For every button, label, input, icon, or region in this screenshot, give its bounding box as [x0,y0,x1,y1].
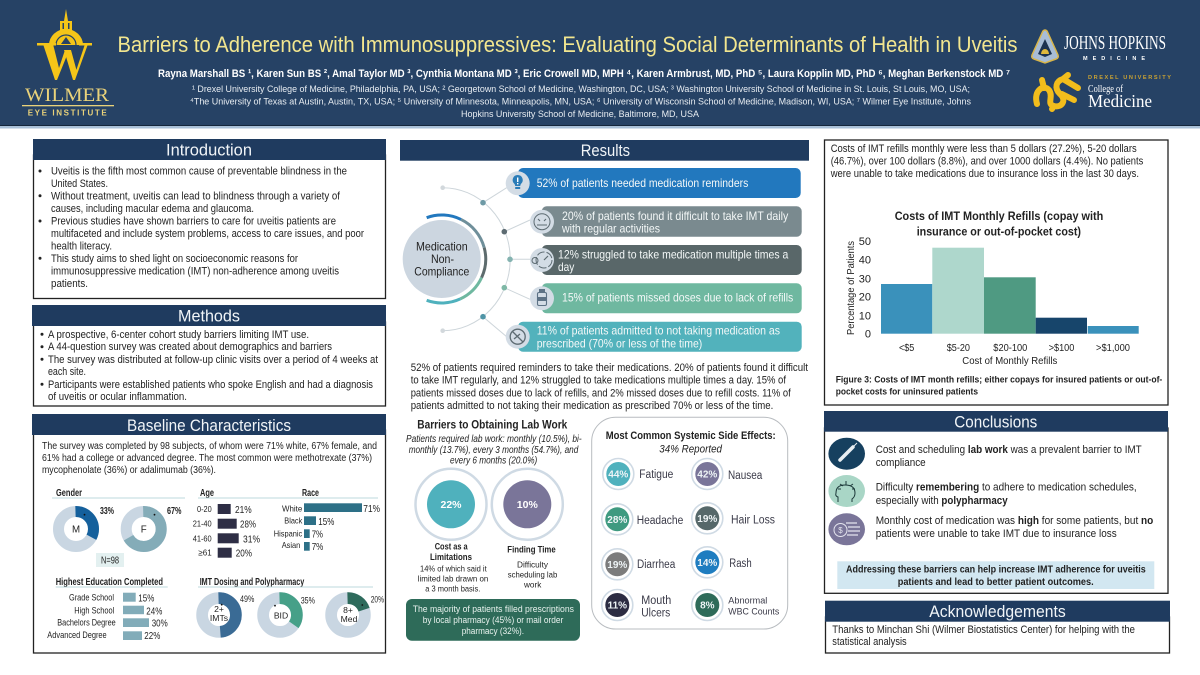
stat: cost limitation 22% [416,469,488,594]
chart: costs of IMT monthly refills: 50 [859,236,871,248]
heading: baseline characteristics [32,414,386,435]
text: acknowledgement: statistical analysis [832,636,907,648]
callout: not taking as prescribed: 11% of patients admitted to not taking medication as [537,324,780,338]
chart: costs of IMT monthly refills: $5-20 [947,343,970,354]
panel: refill costs [824,140,1168,405]
logo: Drexel College of Medicine: College of [1088,84,1123,95]
heading: methods: Methods [178,308,240,326]
section: most common systemic side effects [592,417,788,629]
heading: results: Results [581,142,630,160]
callout: pharmacy: by local pharmacy (45%) or mail order [423,615,563,625]
callout: daily activities difficulty: 20% of patients found it difficult to take IMT daily [562,209,788,223]
chart: gender donuts: 67% [167,506,182,517]
chart: highest education bars: Advanced Degree [47,630,107,640]
chart: gender donuts: Gender [56,488,82,499]
stat: finding time 10%: work [523,580,542,590]
logo: Johns Hopkins Medicine [1032,30,1166,63]
heading: introduction [33,139,386,160]
chart: costs of IMT monthly refills: <$5 [899,343,915,354]
chart: IMT dosing and polypharmacy donuts [198,577,384,632]
chart: gender donuts: N=98 [101,555,119,566]
logo: Johns Hopkins Medicine: MEDICINE [1083,56,1145,62]
section: barriers to obtaining lab work: Barriers to Obtaining Lab Work [417,420,568,432]
chart: costs of IMT monthly refills: >$1,000 [1096,343,1130,354]
callout: addressing barriers: Addressing these barriers can help increase IMT adherence for uveitis [846,564,1146,576]
heading: acknowledgements: Acknowledgements [929,603,1066,621]
chart: IMT dosing and polypharmacy donuts: 2+ [214,604,224,614]
heading: introduction: Introduction [166,142,252,160]
text: results summary: 52% of patients required reminders to take their medications. 20% of patients found it difficult [411,362,808,374]
chart: age bars [193,488,283,560]
panel: methods [32,305,386,406]
section: barriers to obtaining lab work: Patients required lab work: monthly (10.5%), bi- [406,434,582,445]
chart: highest education bars: 22% [144,630,160,642]
figure caption: pocket costs for uninsured patients [836,387,978,398]
text: introduction bullets: Uveitis is the fifth most common cause of preventable blindness in the [51,166,347,178]
stat: headache [602,504,683,535]
chart: gender donuts [52,488,185,567]
panel: introduction [33,139,386,298]
stat: nausea [692,458,763,490]
chart: IMT dosing and polypharmacy donuts: IMT Dosing and Polypharmacy [200,577,305,588]
stat: cost limitation 22%: 14% of which said it [420,563,487,573]
logo: Wilmer Eye Institute: WILMER [25,85,109,106]
callout: daily activities difficulty [530,206,802,237]
text: introduction bullets: Previous studies have shown barriers to care for uveitis patients are [51,216,336,228]
affiliations: ⁴The University of Texas at Austin, Austin, TX, USA; ⁵ University of Minnesota, Minneapolis, MN, USA; ⁶ University of Wisconsin School of Medicine, Madison, WI, USA; ⁷ Wilmer Eye Institute, Johns [190,96,971,106]
text: methods bullets: A prospective, 6-center cohort study barriers limiting IMT use. [48,329,309,341]
icon: syringe [828,438,865,470]
chart: costs of IMT monthly refills: Costs of IMT Monthly Refills (copay with [895,209,1103,223]
chart: race bars: Black [284,515,303,525]
text: methods bullets: A 44-question survey was created about demographics and barriers [48,341,333,353]
text: methods bullets [40,329,378,403]
heading: results [400,140,809,161]
stat: hair loss [692,503,775,534]
stat: finding time 10% [492,469,563,590]
chart: age bars: 20% [236,548,252,560]
chart: costs of IMT monthly refills: insurance or out-of-pocket cost) [917,224,1081,238]
chart: IMT dosing and polypharmacy donuts: IMTs [210,613,228,623]
stat: abnormal WBC counts [692,590,779,620]
chart: gender donuts: F [141,524,147,536]
text: remembering conclusion: Difficulty remembering to adhere to medication schedules, [876,482,1137,494]
text: baseline summary: mycophenolate (36%) or adalimumab (36%). [42,465,216,476]
callout: multiple doses a day: 12% struggled to take medication multiple times a [558,247,789,261]
stat: abnormal WBC counts: Abnormal [728,596,767,607]
icon: coins: $ [838,526,843,535]
text: refill cost summary [830,143,1144,180]
text: introduction bullets: Without treatment, uveitis can lead to blindness through a variety of [51,190,341,202]
chart: costs of IMT monthly refills: Percentage of Patients [846,241,857,335]
chart: age bars: 21% [235,504,252,516]
affiliations: Hopkins University School of Medicine, Baltimore, MD, USA [461,108,700,119]
logo: Drexel College of Medicine [1036,75,1171,111]
chart: costs of IMT monthly refills: 20 [859,292,871,304]
callout: pharmacy: pharmacy (32%). [462,626,524,636]
text: methods bullets: Participants were established patients who spoke English and had a diagnosis [48,379,374,391]
stat: fatigue: Fatigue [639,469,673,481]
chart: IMT dosing and polypharmacy donuts: 49% [240,594,254,604]
chart: IMT dosing and polypharmacy donuts: BID [274,610,288,620]
chart: race bars [274,488,380,553]
section: barriers to obtaining lab work: monthly (13.7%), every 3 months (54.7%), and [409,445,579,456]
callout: pharmacy: The majority of patients filled prescriptions [413,604,574,614]
stat: headache: 28% [607,515,627,526]
panel: acknowledgements [825,601,1170,653]
stat: diarrhea: Diarrhea [637,559,676,571]
diagram: medication non-compliance hub: Medication [416,241,468,254]
diagram: medication non-compliance hub [383,185,532,337]
text: methods bullets: The survey was distributed at follow-up clinic visits over a period of 4 weeks at [48,354,378,366]
stat: cost limitation 22%: a 3 month basis. [425,584,480,594]
affiliations: ¹ Drexel University College of Medicine, Philadelphia, PA, USA; ² Georgetown School of Medicine, Washington, DC, USA; ³ Washington University School of Medicine in St. Louis, St Louis, MO, USA; [192,83,970,94]
stat: mouth ulcers [602,590,671,620]
stat: mouth ulcers: Ulcers [641,607,671,619]
chart: race bars: Asian [282,540,300,550]
text: refill cost summary: (46.7%), over 100 dollars (8.8%), and over 1000 dollars (4.4%). No patients [831,155,1144,167]
text: acknowledgement [832,624,1135,648]
figure caption: Figure 3: Costs of IMT month refills; either copays for insured patients or out-of- [836,374,1162,385]
heading: baseline characteristics: Baseline Characteristics [127,417,291,435]
chart: costs of IMT monthly refills: 10 [859,310,871,322]
chart: highest education bars [47,577,168,642]
icon: head with thoughts [828,475,865,507]
callout: medication reminders: 52% of patients needed medication reminders [537,176,748,190]
chart: costs of IMT monthly refills [846,209,1139,367]
heading: conclusions: Conclusions [954,414,1037,432]
chart: age bars: Age [200,488,214,499]
text: lab work conclusion: Cost and scheduling lab work was a prevalent barrier to IMT [876,444,1142,456]
text: introduction bullets: health literacy. [51,240,112,252]
callout: missed refills: 15% of patients missed doses due to lack of refills [562,290,793,304]
text: introduction bullets: patients. [51,278,88,290]
chart: gender donuts: M [72,524,80,536]
text: introduction bullets: causes, including macular edema and glaucoma. [51,203,254,215]
text: results summary: patients admitted to not taking their medication as prescribed 70% or less of the time. [411,400,773,412]
stat: rash: Rash [729,558,752,570]
text: lab work conclusion [876,444,1142,469]
header band [0,0,1200,128]
callout: pharmacy [406,599,580,641]
panel: results [383,140,809,641]
stat: mouth ulcers: 11% [608,601,627,612]
text: remembering conclusion [876,482,1137,507]
callout: missed refills [530,283,802,313]
stat: hair loss: Hair Loss [731,514,775,526]
callout: daily activities difficulty: with regular activities [561,221,660,235]
text: introduction bullets: This study aims to shed light on socioeconomic reasons for [51,253,298,265]
callout: not taking as prescribed: prescribed (70% or less of the time) [537,336,702,350]
logo: Drexel College of Medicine: Medicine [1088,91,1152,111]
section: most common systemic side effects: Most Common Systemic Side Effects: [606,430,776,442]
section: most common systemic side effects: 34% Reported [659,443,723,455]
chart: IMT dosing and polypharmacy donuts: 35% [301,596,315,606]
chart: age bars: 21-40 [193,519,212,529]
chart: highest education bars: 30% [152,618,168,630]
text: acknowledgement: Thanks to Minchan Shi (Wilmer Biostatistics Center) for helping with the [832,624,1135,636]
chart: highest education bars: Grade School [69,592,114,602]
chart: race bars: Race [302,488,319,499]
chart: race bars: 71% [363,503,380,515]
title: Barriers to Adherence with Immunosuppressives: Evaluating Social Determinants of Health in Uveitis [118,32,1018,57]
text: methods bullets: of uveitis or ocular inflammation. [48,391,187,403]
section: barriers to obtaining lab work: every 6 months (20.0%) [450,456,537,467]
chart: race bars: Hispanic [274,528,303,538]
panel: baseline characteristics [32,414,386,653]
callout: addressing barriers: patients and lead to better patient outcomes. [898,577,1094,588]
stat: abnormal WBC counts: WBC Counts [728,606,779,617]
stat: cost limitation 22%: limited lab drawn on [418,574,488,584]
callout: multiple doses a day [530,245,802,275]
logo: Wilmer Eye Institute: EYE INSTITUTE [28,108,107,118]
chart: age bars: 31% [243,533,260,545]
authors: Rayna Marshall BS ¹, Karen Sun BS ², Amal Taylor MD ³, Cynthia Montana MD ³, Eric Crowell MD, MPH ⁴, Karen Armbrust, MD, PhD ⁵, Laura Kopplin MD, PhD ⁶, Meghan Berkenstock MD ⁷ [158,68,1010,80]
stat: diarrhea: 19% [607,560,627,571]
callout: addressing barriers [837,561,1154,589]
stat: rash: 14% [697,558,717,569]
chart: age bars: 28% [240,519,256,531]
affiliations [190,83,971,119]
heading: conclusions [824,411,1168,432]
diagram: medication non-compliance hub: Compliance [414,265,469,278]
chart: costs of IMT monthly refills: 30 [859,273,871,285]
stat: finding time 10%: 10% [517,499,538,511]
chart: highest education bars: 15% [138,592,154,604]
text: refill cost summary: Costs of IMT refills monthly were less than 5 dollars (27.2%), 5-20 dollars [831,143,1137,155]
stat: cost limitation 22%: Limitations [430,552,472,563]
logo: Wilmer Eye Institute [22,9,114,118]
text: remembering conclusion: especially with polypharmacy [876,495,1008,507]
chart: race bars: White [282,504,303,514]
stat: mouth ulcers: Mouth [641,595,671,607]
diagram: medication non-compliance hub: Non- [431,253,454,266]
chart: costs of IMT monthly refills: 0 [865,329,871,341]
text: baseline summary: 61% had a college or advanced degree. The most common were methotrexate (37%) [42,453,372,464]
chart: age bars: 41-60 [193,533,212,543]
chart: age bars: 0-20 [197,504,212,514]
callout: multiple doses a day: day [558,260,574,274]
text: results summary: patients missed doses due to lack of refills, and 2% missed doses due to refill costs. 11% of [411,387,792,399]
stat: headache: Headache [637,515,683,527]
callout: medication reminders [506,168,801,198]
chart: gender donuts: 33% [100,506,114,517]
chart: race bars: 15% [318,516,334,528]
chart: highest education bars: High School [74,605,114,615]
stat: nausea: Nausea [728,470,763,482]
text: methods bullets: each site. [48,366,86,378]
heading: acknowledgements [825,601,1170,622]
callout: not taking as prescribed [506,322,802,352]
text: baseline summary [42,441,377,476]
heading: methods [32,305,386,326]
chart: costs of IMT monthly refills: $20-100 [993,343,1028,354]
chart: IMT dosing and polypharmacy donuts: Med [341,614,358,624]
section: barriers to obtaining lab work [406,420,582,641]
text: introduction bullets [38,166,364,290]
text: lab work conclusion: compliance [876,457,926,469]
text: cost conclusion: patients were unable to take IMT due to insurance loss [876,528,1117,540]
chart: costs of IMT monthly refills: >$100 [1049,343,1075,354]
logo: Drexel College of Medicine: DREXEL UNIVERSITY [1088,75,1171,81]
stat: fatigue: 44% [608,470,628,481]
text: refill cost summary: were unable to take medications due to insurance loss in the last 30 days. [830,168,1139,180]
chart: race bars: 7% [312,541,323,553]
text: cost conclusion [876,515,1154,540]
text: introduction bullets: multifaceted and include system problems, access to care issues, and poor [51,228,364,240]
icon: coins [828,513,865,545]
stat: nausea: 42% [697,470,717,481]
chart: race bars: 7% [312,528,323,540]
text: introduction bullets: immunosuppressive medication (IMT) non-adherence among uveitis [51,265,340,277]
chart: age bars: ≥61 [198,548,212,558]
panel: conclusions [824,411,1168,593]
chart: costs of IMT monthly refills: 40 [859,254,871,266]
chart: highest education bars: Highest Education Completed [56,577,163,588]
chart: IMT dosing and polypharmacy donuts: 20% [371,595,384,605]
figure caption [836,374,1162,398]
text: introduction bullets: United States. [51,178,108,190]
stat: abnormal WBC counts: 8% [700,601,715,612]
stat: diarrhea [602,549,676,580]
chart: highest education bars: Bachelors Degree [57,618,116,628]
chart: costs of IMT monthly refills: Cost of Monthly Refills [962,356,1057,367]
stat: rash [692,547,752,578]
chart: IMT dosing and polypharmacy donuts: 8+ [343,605,353,615]
stat: fatigue [603,458,673,490]
text: baseline summary: The survey was completed by 98 subjects, of whom were 71% white, 67% female, and [42,441,377,452]
stat: cost limitation 22%: 22% [440,499,462,511]
stat: finding time 10%: scheduling lab [508,569,557,579]
stat: hair loss: 19% [697,514,717,525]
text: cost conclusion: Monthly cost of medication was high for some patients, but no [876,515,1154,527]
stat: finding time 10%: Difficulty [517,559,549,569]
stat: cost limitation 22%: Cost as a [435,541,468,552]
chart: highest education bars: 24% [146,605,162,617]
stat: finding time 10%: Finding Time [507,545,556,556]
text: results summary: to take IMT regularly, and 12% struggled to take medications multiple times a day. 15% of [411,375,787,387]
text: results summary [411,362,808,412]
